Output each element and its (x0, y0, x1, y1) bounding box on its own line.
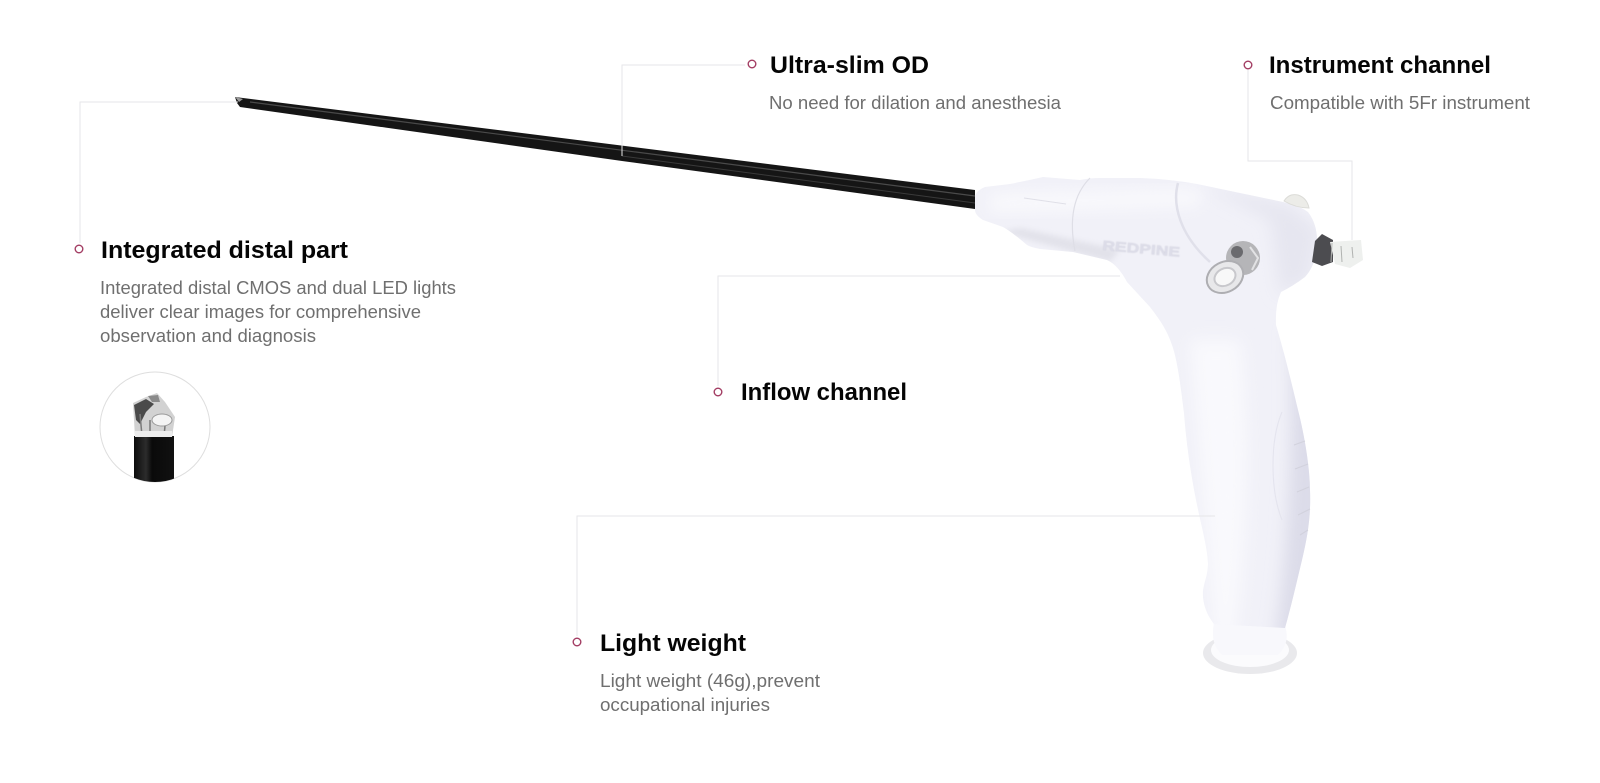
grip ribs (1273, 412, 1310, 535)
top port (1284, 195, 1309, 208)
callout: Ultra-slim OD: Ultra-slim OD (770, 52, 929, 79)
icon: distal tip detail (100, 372, 210, 486)
handle body and nose (975, 177, 1330, 640)
callout: Inflow channel: Inflow channel (741, 379, 907, 406)
shaft (235, 97, 975, 209)
callout: Integrated distal part: Integrated distal part (101, 237, 348, 264)
device: endoscope (235, 97, 1363, 674)
callout: Light weight (573, 630, 820, 715)
callout: Integrated distal part: Integrated distal CMOS and dual LED lights (100, 278, 456, 298)
callout: Integrated distal part: deliver clear images for comprehensive (100, 302, 421, 322)
callout: Light weight: Light weight (600, 630, 746, 657)
base flange (1203, 622, 1297, 674)
callout: Ultra-slim OD (748, 52, 1062, 113)
callout: Integrated distal part (75, 237, 456, 346)
callout: Instrument channel: Compatible with 5Fr instrument (1270, 93, 1530, 113)
callout: Instrument channel (1244, 52, 1530, 113)
callout: Light weight: occupational injuries (600, 695, 770, 715)
inflow port (1201, 241, 1260, 299)
callout: Light weight: Light weight (46g),prevent (600, 671, 820, 691)
brand mark: REDPINE (1102, 237, 1181, 260)
leader lines (80, 65, 1352, 636)
callout: Instrument channel: Instrument channel (1269, 52, 1491, 79)
callout: Ultra-slim OD: No need for dilation and anesthesia (769, 93, 1062, 113)
callout: Integrated distal part: observation and diagnosis (100, 326, 316, 346)
instrument port (1312, 234, 1363, 268)
